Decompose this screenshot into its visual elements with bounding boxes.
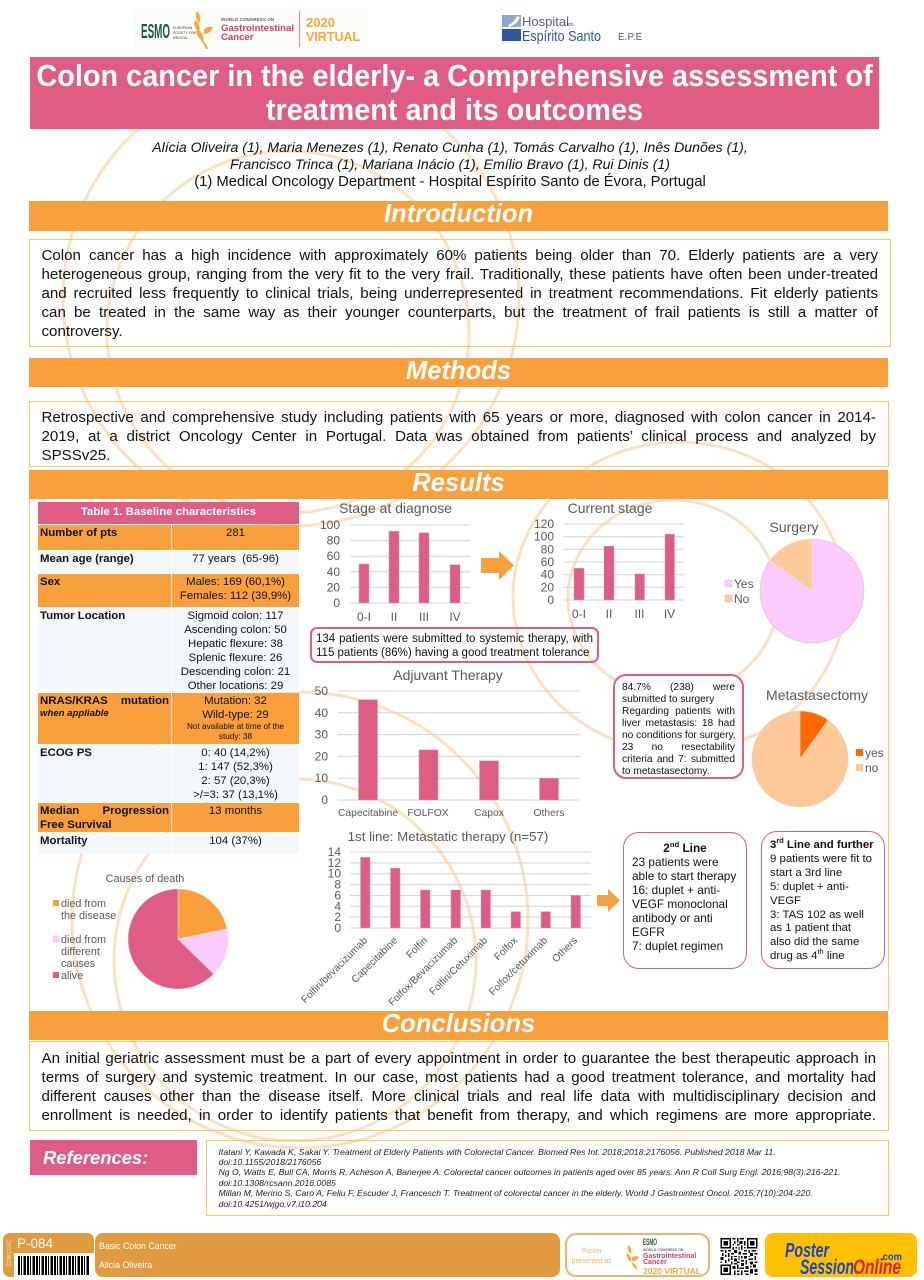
chart: stage at diagnose: III — [419, 610, 429, 624]
chart: causes of death pie: the disease — [61, 910, 116, 922]
chart: stage at diagnose: 100 — [320, 518, 340, 532]
callout: 3rd line and further: as 1 patient that — [770, 922, 851, 934]
heading: Introduction — [29, 201, 888, 231]
chart: causes of death pie: died from — [61, 898, 106, 910]
callout: 3rd line and further: start a 3rd line — [770, 867, 842, 879]
callout: 2nd line: EGFR — [632, 925, 665, 939]
row: number of pts — [38, 525, 299, 550]
chart: 1st line metastatic therapy: Others — [550, 935, 580, 965]
chart: stage at diagnose: IV — [449, 610, 461, 624]
row: NRAS/KRAS mutation: study: 38 — [219, 732, 252, 740]
chart: metastasectomy pie: Metastasectomy — [766, 687, 868, 703]
chart: adjuvant therapy — [315, 667, 580, 819]
footer: poster presented at logo: Cancer — [643, 1259, 667, 1266]
callout: 3rd line and further: VEGF — [770, 895, 801, 907]
row: number of pts: 281 — [226, 527, 245, 539]
logo: ESMO World Congress on Gastrointestinal Cancer: MEDICAL — [173, 36, 188, 40]
chart: adjuvant therapy: 10 — [315, 771, 328, 785]
row: sex: Females: 112 (39,9%) — [180, 590, 291, 602]
row: ECOG PS: 0: 40 (14,2%) — [201, 747, 270, 759]
row: tumor location: Splenic flexure: 26 — [189, 652, 282, 664]
callout: 2nd line — [623, 832, 747, 969]
chart: current stage: 100 — [534, 530, 554, 544]
row: tumor location — [38, 608, 299, 692]
chart: adjuvant therapy: Capox — [474, 808, 505, 819]
row: tumor location: Ascending colon: 50 — [184, 624, 287, 636]
footer: session and author panel: Basic Colon Cancer — [99, 1241, 177, 1251]
chart: metastasectomy pie: no — [865, 761, 879, 775]
chart: 1st line metastatic therapy: Folfox/cetuximab — [487, 935, 550, 998]
row: ECOG PS — [38, 745, 299, 802]
footer: poster id and barcode: P-084 — [17, 1236, 53, 1251]
chart: stage at diagnose: 0-I — [357, 610, 371, 624]
footer: PosterSessionOnline logo: Poster — [785, 1240, 830, 1262]
panel: conclusions text — [29, 1041, 889, 1131]
panel: methods text: Retrospective and comprehensive study including patients with 65 years or more, diagnosed with colon cancer in 2014- — [42, 408, 876, 426]
logo: ESMO World Congress on Gastrointestinal Cancer: WORLD CONGRESS ON — [221, 17, 275, 22]
row: mean age: 77 years (65-96) — [192, 553, 279, 565]
panel: introduction text: controversy. — [42, 322, 123, 340]
callout: surgery and metastasis: liver metastasis: 18 had — [622, 718, 735, 729]
chart: 1st line metastatic therapy: Folfiri/bevacizumab — [300, 935, 370, 1006]
row: NRAS/KRAS mutation: Not available at time of the — [187, 722, 284, 731]
callout: 2nd line: 23 patients were — [632, 855, 719, 869]
chart: current stage: 0-I — [572, 607, 586, 621]
chart: current stage — [534, 500, 684, 621]
row: tumor location: Sigmoid colon: 117 — [187, 610, 284, 622]
chart: adjuvant therapy: FOLFOX — [407, 808, 449, 819]
panel: results frame — [29, 499, 889, 1011]
chart: 1st line metastatic therapy: Capecitabine — [350, 935, 400, 986]
footer: poster presented at logo: presented at: — [572, 1258, 612, 1265]
heading: Results — [29, 470, 888, 499]
footer: poster id and barcode — [3, 1233, 94, 1277]
chart: adjuvant therapy: 20 — [315, 749, 328, 763]
heading: Results: Results — [412, 469, 505, 497]
chart: adjuvant therapy: 50 — [315, 684, 328, 698]
panel: introduction text: and recruited less frequently to clinical trials, being underrepresented in treatment recommendations. Fit elderly patients — [42, 284, 878, 302]
footer: session and author panel — [95, 1233, 560, 1277]
heading: Methods: Methods — [406, 357, 511, 385]
chart: 1st line metastatic therapy: 6 — [334, 888, 341, 902]
row: NRAS/KRAS mutation — [38, 693, 299, 744]
callout: surgery and metastasis: 23 no resectability — [622, 742, 735, 753]
panel: references list: doi:10.1155/2018/2176056 — [218, 1157, 321, 1167]
row: mortality: 104 (37%) — [209, 835, 262, 847]
callout: 3rd line and further — [761, 831, 885, 969]
callout: 3rd line and further: 5: duplet + anti- — [770, 881, 849, 893]
logo: ESMO World Congress on Gastrointestinal Cancer: SOCIETY FOR — [173, 31, 196, 35]
heading: Methods — [29, 358, 888, 387]
row: median PFS: 13 months — [209, 805, 262, 817]
table header: Table 1. Baseline characteristics — [81, 506, 256, 518]
chart: stage at diagnose — [320, 500, 470, 624]
chart: 1st line metastatic therapy: 8 — [334, 878, 341, 892]
row: tumor location: Tumor Location — [40, 610, 125, 622]
chart: current stage: III — [634, 607, 645, 621]
row: sex — [38, 574, 299, 607]
chart: current stage: Current stage — [568, 500, 653, 516]
chart: current stage: 40 — [541, 568, 554, 582]
callout: surgery and metastasis: criteria and 7: submitted — [622, 754, 735, 765]
authors and affiliation — [152, 139, 748, 190]
chart: stage at diagnose: 20 — [327, 580, 340, 594]
heading: Introduction: Introduction — [384, 200, 533, 228]
footer: poster presented at logo: Poster — [582, 1248, 603, 1255]
row: tumor location: Descending colon: 21 — [181, 666, 290, 678]
chart: 1st line metastatic therapy: Folfox — [493, 935, 521, 963]
chart: causes of death pie: different — [61, 946, 100, 958]
row: sex: Males: 169 (60,1%) — [186, 576, 285, 588]
panel: references list: doi:10.1308/rcsann.2016.0085 — [218, 1178, 336, 1188]
chart: current stage: 80 — [541, 542, 554, 556]
callout: 3rd line and further: 9 patients were fit to — [770, 853, 872, 865]
chart: current stage: II — [606, 607, 612, 621]
row: mean age — [38, 551, 299, 573]
row: number of pts: Number of pts — [40, 527, 117, 539]
chart: stage at diagnose: II — [391, 610, 397, 624]
row: median PFS — [38, 803, 299, 832]
chart: causes of death pie: died from — [61, 934, 106, 946]
chart: adjuvant therapy: 30 — [315, 728, 328, 742]
callout: surgery and metastasis — [613, 674, 744, 779]
footer: poster presented at logo: Gastrointestinal — [643, 1253, 696, 1260]
logo: ESMO World Congress on Gastrointestinal Cancer: 2020 — [306, 15, 335, 30]
footer: PosterSessionOnline logo: .com — [880, 1252, 902, 1263]
chart: metastasectomy pie — [752, 687, 884, 807]
callout: 3rd line and further: 3rd Line and further — [770, 836, 874, 851]
panel: introduction text: Colon cancer has a high incidence with approximately 60% patients being older than 70. Elderly patients are a very — [42, 246, 878, 264]
heading: References — [30, 1140, 197, 1175]
footer: poster id and barcode: 22WCGIC — [7, 1239, 13, 1267]
panel: methods text: SPSSv25. — [42, 446, 110, 464]
chart: 1st line metastatic therapy: 4 — [334, 899, 341, 913]
callout: surgery and metastasis: submitted to surgery to metastasectomy. — [622, 694, 714, 777]
chart: stage at diagnose: 40 — [327, 565, 340, 579]
footer: poster presented at logo: 2020 VIRTUAL — [643, 1266, 701, 1276]
callout: 2nd line: 16: duplet + anti- — [632, 883, 720, 897]
footer: QR code — [720, 1238, 758, 1275]
chart: adjuvant therapy: 40 — [315, 706, 328, 720]
row: mean age: Mean age (range) — [40, 553, 134, 565]
callout: surgery and metastasis: Regarding patients with — [622, 706, 735, 717]
title: Colon cancer in the elderly- a Comprehensive assessment of — [36, 59, 873, 93]
panel: introduction text: heterogeneous group, ranging from the very fit to the very frail. Traditionally, these patients have often been under-treated — [42, 266, 878, 282]
chart: adjuvant therapy: Adjuvant Therapy — [393, 667, 503, 683]
logo: ESMO World Congress on Gastrointestinal Cancer: Gastrointestinal — [221, 23, 294, 34]
title — [30, 57, 879, 129]
footer: poster presented at logo: ESMO — [643, 1237, 657, 1247]
row: NRAS/KRAS mutation: Mutation: 32 — [204, 695, 267, 707]
footer: session and author panel: Alicia Oliveira — [99, 1260, 152, 1270]
row: tumor location: Other locations: 29 — [188, 680, 283, 692]
chart: causes of death pie: causes — [61, 958, 96, 970]
callout: 2nd line: VEGF monoclonal — [632, 897, 728, 911]
logo: Hospital Espirito Santo: do — [568, 22, 574, 28]
callout: 3rd line and further: 3: TAS 102 as well — [770, 909, 864, 921]
row: mortality: Mortality — [40, 835, 87, 847]
chart: 1st line metastatic therapy: 1st line: Metastatic therapy (n=57) — [348, 829, 548, 844]
chart: current stage: 20 — [541, 580, 554, 594]
panel: introduction text — [29, 239, 891, 347]
row: median PFS: Median Progression — [40, 805, 169, 817]
panel: methods text — [29, 401, 889, 467]
chart: 1st line metastatic therapy: 2 — [334, 910, 341, 924]
logo: ESMO World Congress on Gastrointestinal Cancer: VIRTUAL — [306, 30, 361, 44]
authors and affiliation: (1) Medical Oncology Department - Hospital Espírito Santo de Évora, Portugal — [194, 174, 706, 190]
panel: references list: Millan M, Merino S, Caro A, Feliu F, Escuder J, Francesch T. Treatment of colorectal cancer in the elderly. World J Gastrointest Oncol. 2015;7(10):204-220. — [218, 1188, 813, 1198]
chart: metastasectomy pie: yes — [865, 746, 884, 760]
row: ECOG PS: >/=3: 37 (13,1%) — [193, 789, 278, 801]
heading: References: References: — [43, 1147, 148, 1168]
chart: current stage: 0 — [547, 593, 554, 607]
chart: 1st line metastatic therapy: 10 — [328, 867, 341, 881]
chart: 1st line metastatic therapy — [300, 829, 591, 1009]
table header — [38, 502, 299, 524]
panel: conclusions text: different causes other than the disease itself. More clinical trials and real life data with multidisciplinary decision and — [42, 1088, 876, 1104]
row: NRAS/KRAS mutation: Wild-type: 29 — [202, 709, 269, 721]
callout: systemic therapy: 115 patients (86%) having a good treatment tolerance — [316, 646, 589, 658]
chart: stage at diagnose: 60 — [327, 549, 340, 563]
panel: references list: doi:10.4251/wjgo.v7.i10.204 — [218, 1199, 327, 1209]
callout: systemic therapy — [310, 627, 599, 663]
callout: 3rd line and further: also did the same — [770, 936, 859, 948]
logo: ESMO World Congress on Gastrointestinal Cancer: ESMO — [141, 21, 170, 43]
row: mortality — [38, 833, 299, 854]
chart: surgery pie: Surgery — [769, 519, 819, 535]
chart: surgery pie: No — [734, 592, 750, 606]
authors and affiliation: Francisco Trinca (1), Mariana Inácio (1), Emílio Bravo (1), Rui Dinis (1) — [230, 156, 670, 172]
chart: stage at diagnose: Stage at diagnose — [339, 500, 452, 516]
footer: poster presented at logo — [565, 1233, 710, 1277]
chart: current stage: 120 — [534, 517, 554, 531]
panel: introduction text: can be treated in the same way as their younger counterparts, but the treatment of frail patients is still a matter of — [42, 304, 878, 320]
footer: PosterSessionOnline logo — [765, 1233, 917, 1277]
logo: Hospital Espirito Santo: Hospital — [522, 14, 569, 29]
callout: systemic therapy: 134 patients were submitted to systemic therapy, with — [316, 632, 593, 644]
callout: 2nd line: able to start therapy — [632, 869, 736, 883]
callout: 2nd line: 7: duplet regimen — [632, 939, 723, 953]
authors and affiliation: Alícia Oliveira (1), Maria Menezes (1), Renato Cunha (1), Tomás Carvalho (1), Inês Dunões (1), — [152, 139, 748, 155]
chart: adjuvant therapy: 0 — [321, 793, 328, 807]
row: median PFS: Free Survival — [40, 819, 112, 831]
row: tumor location: Hepatic flexure: 38 — [188, 638, 283, 650]
chart: current stage: 60 — [541, 555, 554, 569]
chart: 1st line metastatic therapy: 12 — [328, 856, 341, 870]
logo: ESMO World Congress on Gastrointestinal Cancer: EUROPEAN — [173, 26, 193, 30]
row: NRAS/KRAS mutation: NRAS/KRAS mutation — [40, 695, 169, 707]
panel: references list: Ng O, Watts E, Bull CA, Morris R, Acheson A, Banerjee A. Colorectal cancer outcomes in patients aged over 85 years. Ann R Coll Surg Engl. 2016;98(3):216-221. — [218, 1167, 840, 1177]
chart: causes of death pie: alive — [61, 970, 83, 982]
chart: adjuvant therapy: Others — [534, 808, 564, 819]
logo: Hospital Espirito Santo — [502, 14, 643, 44]
panel: references list: Itatani Y, Kawada K, Sakai Y. Treatment of Elderly Patients with Colorectal Cancer. Biomed Res Int. 2018;2018:2176056. Published 2018 Mar 11. — [218, 1146, 776, 1156]
heading: Conclusions — [29, 1011, 888, 1040]
callout: 3rd line and further: drug as 4th line — [770, 947, 845, 962]
row: sex: Sex — [40, 576, 60, 588]
chart: surgery pie: Yes — [734, 577, 754, 591]
row: NRAS/KRAS mutation: when appliable — [40, 708, 109, 719]
chart: 1st line metastatic therapy: 14 — [328, 845, 341, 859]
logo: ESMO World Congress on Gastrointestinal Cancer: Cancer — [221, 32, 254, 43]
row: ECOG PS: 2: 57 (20,3%) — [201, 775, 270, 787]
chart: 1st line metastatic therapy: Folfox/Bevacizumab — [387, 935, 460, 1009]
panel: methods text: 2019, at a district Oncology Center in Portugal. Data was obtained from patients’ clinical process and analyzed by — [42, 428, 876, 444]
row: ECOG PS: 1: 147 (52,3%) — [198, 761, 273, 773]
title: treatment and its outcomes — [266, 93, 643, 127]
panel: conclusions text: An initial geriatric assessment must be a part of every appointment in order to guarantee the best therapeutic approach in — [42, 1050, 876, 1066]
logo: Hospital Espirito Santo: E.P.E — [618, 32, 643, 43]
chart: adjuvant therapy: Capecitabine — [338, 808, 398, 819]
heading: Conclusions: Conclusions — [382, 1010, 535, 1038]
logo: ESMO World Congress on Gastrointestinal Cancer — [141, 11, 361, 49]
chart: surgery pie — [725, 519, 864, 643]
callout: surgery and metastasis: no conditions for surgery, — [622, 730, 736, 741]
footer: poster presented at logo: WORLD CONGRESS ON — [643, 1248, 684, 1252]
panel: conclusions text: enrollment is needed, in order to identify patients that benefit from therapy, and which regimens are more appropriate. — [42, 1106, 876, 1124]
chart: 1st line metastatic therapy: Folfiri — [405, 935, 430, 961]
chart: current stage: IV — [664, 607, 675, 621]
callout: 2nd line: antibody or anti — [632, 911, 713, 925]
chart: causes of death pie: Causes of death — [106, 873, 184, 885]
chart: stage at diagnose: 80 — [327, 534, 340, 548]
arrow: stage to current stage — [481, 551, 514, 580]
panel: references list — [206, 1140, 889, 1216]
row: ECOG PS: ECOG PS — [40, 747, 92, 759]
callout: 2nd line: 2nd Line — [663, 840, 707, 854]
chart: causes of death pie — [53, 873, 228, 989]
arrow: first line to second line — [597, 889, 620, 912]
table: baseline characteristics — [38, 502, 299, 854]
chart: 1st line metastatic therapy: Folfiri/Cetuximab — [428, 935, 490, 998]
chart: 1st line metastatic therapy: 0 — [334, 921, 341, 935]
callout: surgery and metastasis: 84.7% (238) were — [622, 682, 735, 693]
panel: conclusions text: terms of surgery and systemic treatment. In our case, most patients had a good treatment tolerance, and mortality had — [42, 1068, 876, 1086]
chart: stage at diagnose: 0 — [333, 596, 340, 610]
